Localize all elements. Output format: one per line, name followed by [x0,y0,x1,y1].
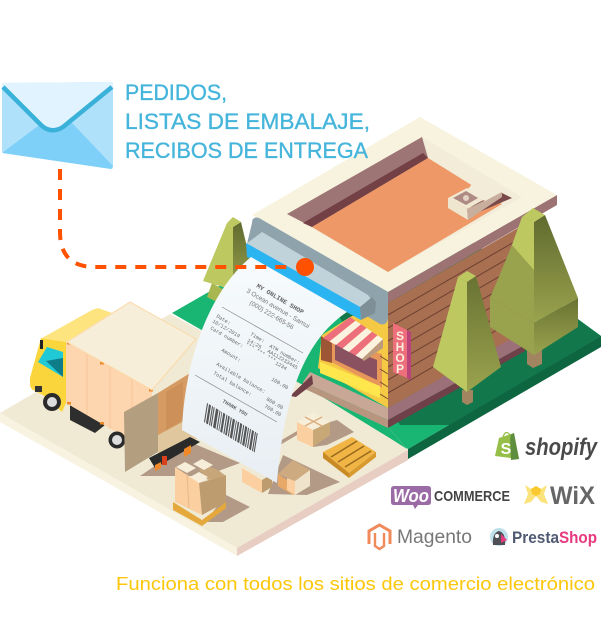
receipt text: Total balance: [212,371,253,398]
isometric ground: loading yard [0,314,408,556]
barcode [206,412,258,444]
heading: documents: RECIBOS DE ENTREGA [125,138,368,163]
receipt text: 14:25 [246,338,262,351]
logo: WooCommerce: Woo [393,486,429,506]
stacked boxes on pallet [173,459,226,526]
receipt text: Date: [215,314,231,327]
logo: WooCommerce: COMMERCE [434,488,510,505]
center boxes [242,460,310,495]
receipt text: 1234 [274,361,288,372]
printer slab [246,232,372,307]
receipt text: Time: [249,332,265,345]
single box [297,412,330,447]
receipt text: ATM number: [268,344,301,366]
receipt text: 3 Ocean avenue - Samui [245,288,310,330]
lift gate [149,437,200,471]
wheels [43,393,126,448]
receipt text: 700.00 [263,404,282,418]
logo: Shopify: S [501,441,512,458]
connector end dot [296,258,314,276]
open door [124,393,158,472]
logo: WooCommerce [391,486,510,509]
awning [323,317,383,361]
blue slot [246,243,361,320]
printer housing [246,218,388,324]
receipt text: Amount: [220,348,242,364]
wood wall [388,224,540,408]
receipt text: 10/12/2019 [211,319,241,340]
receipt text: (000) 222-665-56 [248,300,295,331]
logo: Magento: Magento [397,526,472,548]
truck cab [30,308,112,412]
receipt text [195,283,310,422]
logo: Shopify [495,432,598,461]
receipt text: Available balance: [215,362,266,395]
heading: documents: LISTAS DE EMBALAJE, [125,109,370,134]
logo: Wix: WiX [550,482,595,510]
roof vent [448,183,512,220]
shop sign: S [396,329,404,343]
delivery truck [30,302,205,472]
logo: PrestaShop: Presta [512,528,559,547]
receipt paper [182,257,347,483]
icon: envelope [2,82,113,169]
wooden pallet [323,437,376,478]
receipt text: 800.00 [265,397,284,411]
infographic canvas [0,82,601,590]
receipt text: THANK YOU [221,399,248,418]
dashed connector line [60,169,292,267]
logo: Wix [524,482,595,510]
cargo box side [66,342,153,453]
back tree [203,217,256,310]
roof [252,117,557,303]
receipt text: AA112233445 [266,349,299,371]
shop sign: H [396,340,404,354]
shop sign: O [395,351,405,365]
cargo interior [158,370,205,456]
cargo box top [67,302,196,390]
receipt text: 100.00 [270,377,289,391]
plinth [290,330,525,428]
yellow storefront wall [318,300,388,408]
large right tree [490,208,578,368]
logo: PrestaShop [490,528,597,547]
receipt text: *** *** *** [244,342,277,364]
shop building [252,117,557,428]
chassis [70,405,105,433]
isometric ground: green lawn [172,185,601,459]
receipt printer [246,218,388,324]
heading: documents: PEDIDOS, [125,80,227,105]
printer end cap [360,297,376,320]
floor shadows [140,420,354,522]
heading: documents [125,80,370,163]
logo: Magento [369,525,472,549]
logo: PrestaShop: Shop [559,528,597,547]
caption: Funciona con todos los sitios de comercio electrónico [116,573,595,594]
shop sign: P [396,362,404,376]
receipt text: Card number: [209,326,244,350]
middle tree [433,271,501,405]
shop sign [393,323,411,380]
receipt text: MY ONLINE SHOP [255,283,305,316]
